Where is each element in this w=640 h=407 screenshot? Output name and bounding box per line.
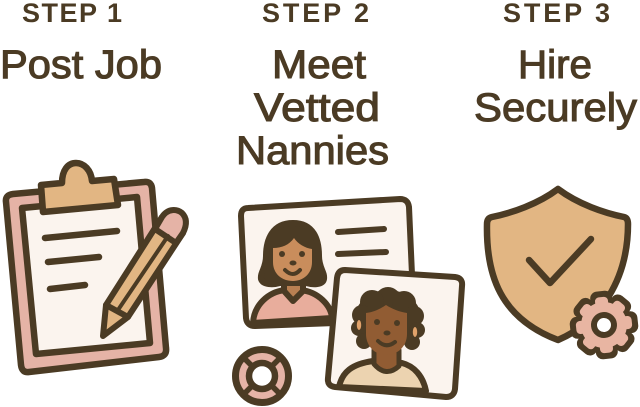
portrait: woman with bob hair bbox=[253, 223, 332, 323]
step 2 title: Nannies bbox=[236, 129, 389, 173]
icon: gear bbox=[567, 288, 640, 362]
step 2 title: Meet bbox=[272, 43, 366, 87]
step 3 title bbox=[474, 43, 637, 130]
icon: life ring bbox=[236, 350, 288, 402]
step 2 title: Vetted bbox=[254, 86, 380, 130]
step 1 title: Post Job bbox=[0, 43, 162, 87]
card: nanny profile two bbox=[328, 270, 462, 397]
step 2 title bbox=[236, 43, 389, 173]
step 3 title: Hire bbox=[518, 43, 592, 87]
icon: shield with check bbox=[487, 189, 628, 340]
portrait: person with curly hair bbox=[339, 287, 426, 391]
text lines: profile one bbox=[338, 229, 386, 254]
icon: pencil bbox=[103, 210, 186, 336]
step 3 title: Securely bbox=[474, 86, 637, 130]
card: nanny profile one bbox=[241, 199, 414, 326]
icon: clipboard bbox=[6, 163, 166, 372]
